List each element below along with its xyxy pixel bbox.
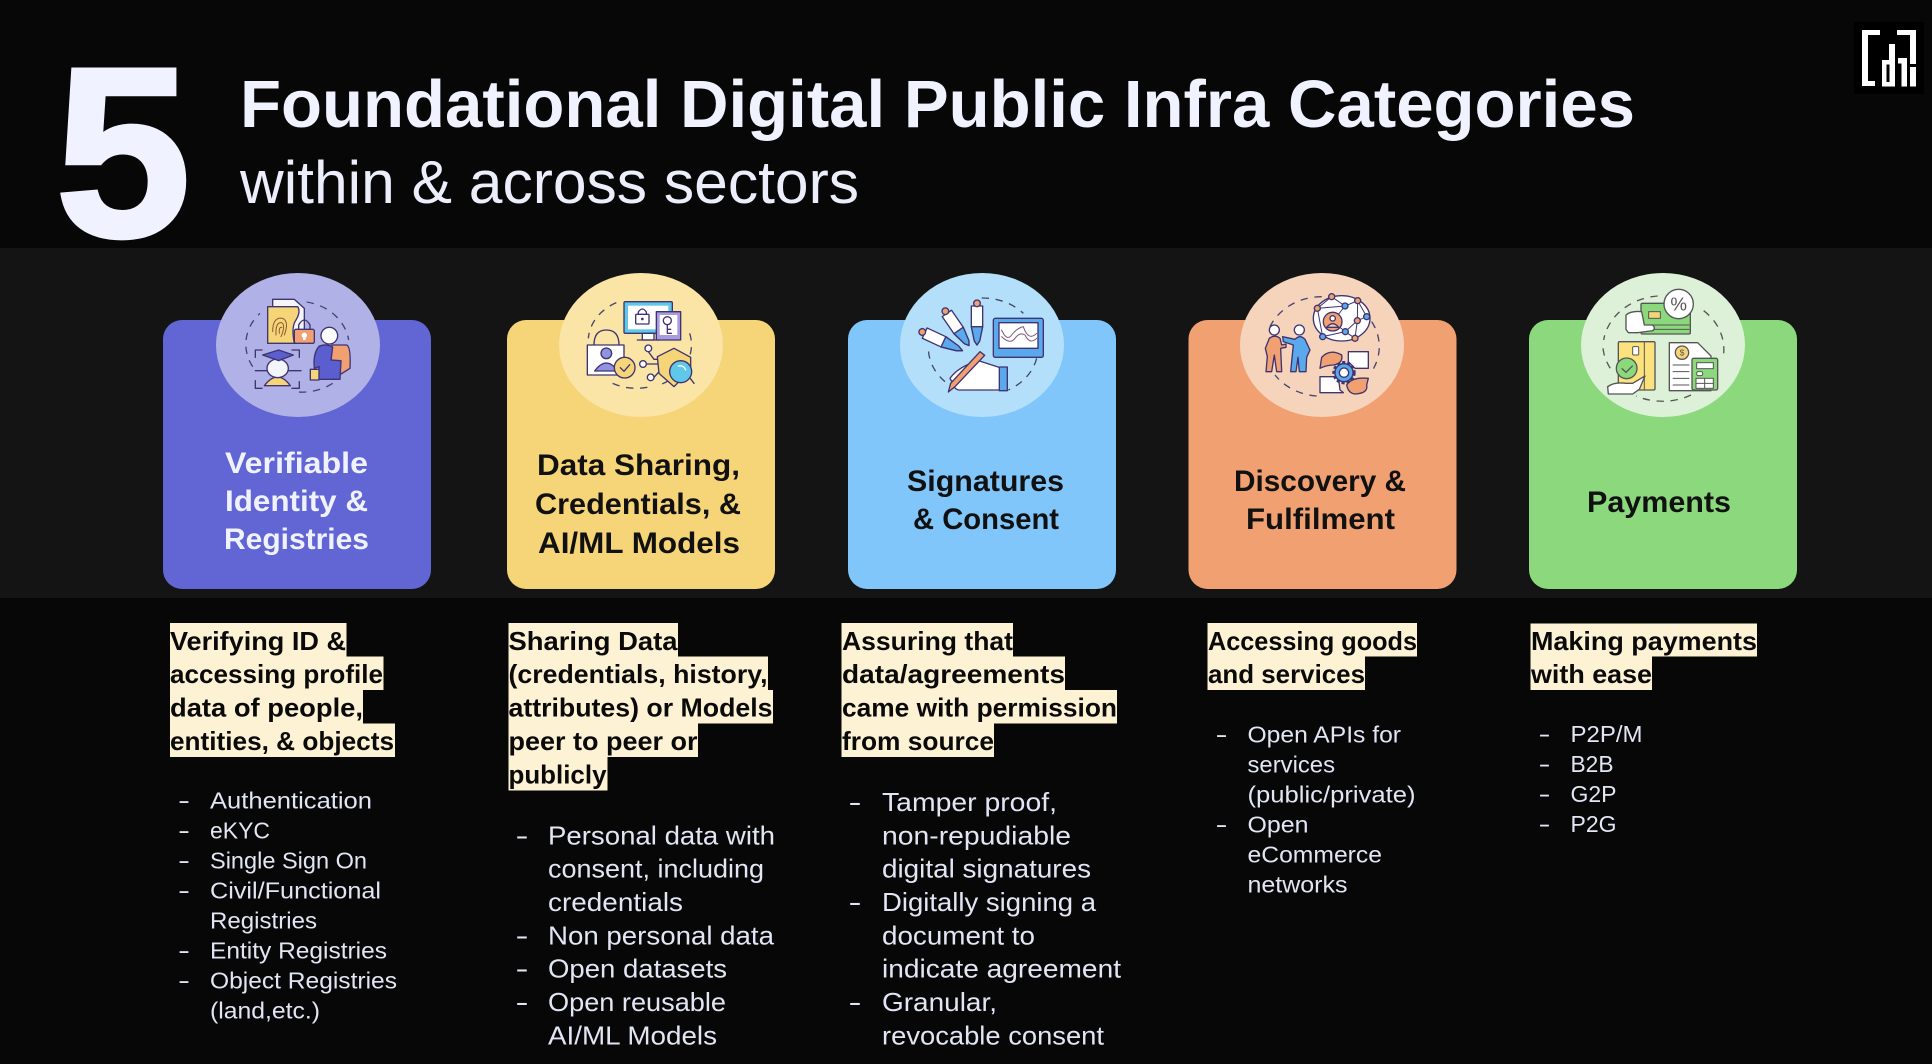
- highlighted summary: Accessing goods: [1208, 626, 1417, 656]
- big number 5: 5: [55, 18, 191, 288]
- bullet list: P2G: [1570, 811, 1616, 837]
- bullet list: -: [848, 787, 862, 817]
- bullet list: Entity Registries: [210, 938, 387, 964]
- highlighted summary: [1530, 624, 1757, 690]
- panel: Payments: [1529, 273, 1797, 837]
- bullet list: -: [1538, 811, 1550, 837]
- panel: Data Sharing, Credentials, & AI/ML Models: [507, 273, 775, 1050]
- bullet list: -: [516, 920, 528, 950]
- card title: AI/ML Models: [538, 527, 740, 560]
- bullet list: Tamper proof,: [882, 787, 1057, 817]
- icon: payments badge: $: [1680, 348, 1685, 358]
- card title: Verifiable: [225, 447, 368, 480]
- icon: data sharing badge: [559, 273, 723, 417]
- bullet list: networks: [1248, 872, 1348, 898]
- highlighted summary: entities, & objects: [170, 726, 394, 756]
- subtitle: within & across sectors: [239, 149, 859, 216]
- bullet list: Open APIs for: [1248, 722, 1401, 748]
- bullet list: -: [1216, 812, 1228, 838]
- card: [163, 320, 431, 589]
- highlighted summary: [170, 623, 395, 757]
- highlighted summary: came with permission: [842, 692, 1117, 722]
- bullet list: (public/private): [1248, 782, 1416, 808]
- title: Foundational Digital Public Infra Categories: [240, 67, 1635, 142]
- bullet list: Open reusable: [548, 987, 726, 1017]
- bullet list: -: [1216, 722, 1228, 748]
- bullet list: -: [178, 968, 190, 994]
- bullet list: indicate agreement: [882, 954, 1122, 984]
- bullet list: eCommerce: [1248, 842, 1382, 868]
- card title: Registries: [224, 523, 369, 556]
- bullet list: -: [178, 878, 190, 904]
- card title: [535, 449, 741, 560]
- bullet list: [848, 787, 1122, 1050]
- bullet list: -: [1538, 721, 1550, 747]
- highlighted summary: from source: [842, 726, 994, 756]
- card title: [224, 447, 369, 556]
- bullet list: [516, 820, 775, 1050]
- panel: Signatures & Consent: [842, 273, 1122, 1050]
- bullet list: [178, 788, 397, 1024]
- highlighted summary: Assuring that: [842, 626, 1013, 656]
- card title: Signatures: [907, 465, 1064, 498]
- card title: Payments: [1587, 486, 1731, 519]
- bullet list: -: [178, 788, 190, 814]
- bullet list: -: [516, 820, 528, 850]
- bullet list: digital signatures: [882, 854, 1091, 884]
- bullet list: G2P: [1570, 781, 1616, 807]
- card title: [1234, 465, 1406, 536]
- highlighted summary: publicly: [508, 760, 607, 790]
- bullet list: Open: [1248, 812, 1308, 838]
- highlighted summary: data of people,: [170, 692, 363, 722]
- bullet list: -: [178, 848, 190, 874]
- bullet list: Granular,: [882, 987, 997, 1017]
- highlighted summary: [508, 623, 773, 790]
- panel: Discovery & Fulfilment: [1188, 273, 1456, 898]
- highlighted summary: Verifying ID &: [170, 626, 346, 656]
- bullet list: eKYC: [210, 818, 270, 844]
- bullet list: -: [1538, 781, 1550, 807]
- bullet list: B2B: [1570, 751, 1614, 777]
- bullet list: credentials: [548, 887, 683, 917]
- highlighted summary: with ease: [1530, 659, 1652, 689]
- card: [1188, 320, 1456, 589]
- bullet list: Object Registries: [210, 968, 397, 994]
- bullet list: Open datasets: [548, 954, 727, 984]
- bullet list: Authentication: [210, 788, 372, 814]
- card: [507, 320, 775, 589]
- bullet list: Single Sign On: [210, 848, 367, 874]
- bullet list: Personal data with: [548, 820, 775, 850]
- card: [848, 320, 1116, 589]
- highlighted summary: and services: [1208, 659, 1365, 689]
- highlighted summary: Sharing Data: [508, 626, 678, 656]
- bullet list: AI/ML Models: [548, 1020, 717, 1050]
- panel: Verifiable Identity & Registries: [163, 273, 431, 1024]
- highlighted summary: accessing profile: [170, 659, 383, 689]
- bullet list: Digitally signing a: [882, 887, 1097, 917]
- highlighted summary: attributes) or Models: [508, 692, 772, 722]
- bullet list: Registries: [210, 908, 317, 934]
- icon: payments badge: [1581, 273, 1745, 417]
- highlighted summary: [842, 623, 1117, 757]
- logo: [1854, 22, 1924, 94]
- bullet list: P2P/M: [1570, 721, 1642, 747]
- icon: payments badge: %: [1670, 294, 1687, 315]
- card title: Discovery &: [1234, 465, 1406, 498]
- bullet list: (land,etc.): [210, 998, 320, 1024]
- icon: discovery badge: [1240, 273, 1404, 417]
- icon: identity badge: [216, 273, 380, 417]
- bullet list: services: [1248, 752, 1335, 778]
- card: [1529, 320, 1797, 589]
- card title: Data Sharing,: [537, 449, 740, 482]
- highlighted summary: Making payments: [1531, 626, 1757, 656]
- card title: Identity &: [225, 485, 368, 518]
- card title: [907, 465, 1064, 536]
- bullet list: -: [848, 887, 862, 917]
- bullet list: -: [178, 938, 190, 964]
- highlighted summary: data/agreements: [842, 659, 1065, 689]
- bullet list: [1216, 722, 1416, 898]
- bullet list: consent, including: [548, 854, 764, 884]
- bullet list: -: [516, 954, 528, 984]
- bullet list: Non personal data: [548, 920, 775, 950]
- card title: Credentials, &: [535, 488, 741, 521]
- card title: & Consent: [913, 503, 1059, 536]
- icon: signature badge: [900, 273, 1064, 417]
- card title: Fulfilment: [1246, 503, 1395, 536]
- bullet list: -: [516, 987, 528, 1017]
- bullet list: revocable consent: [882, 1020, 1105, 1050]
- bullet list: Civil/Functional: [210, 878, 381, 904]
- highlighted summary: (credentials, history,: [508, 659, 768, 689]
- bullet list: [1538, 721, 1642, 837]
- bullet list: non-repudiable: [882, 820, 1071, 850]
- highlighted summary: [1208, 623, 1417, 690]
- bullet list: document to: [882, 920, 1035, 950]
- bullet list: -: [848, 987, 862, 1017]
- bullet list: -: [178, 818, 190, 844]
- bullet list: -: [1538, 751, 1550, 777]
- highlighted summary: peer to peer or: [508, 726, 698, 756]
